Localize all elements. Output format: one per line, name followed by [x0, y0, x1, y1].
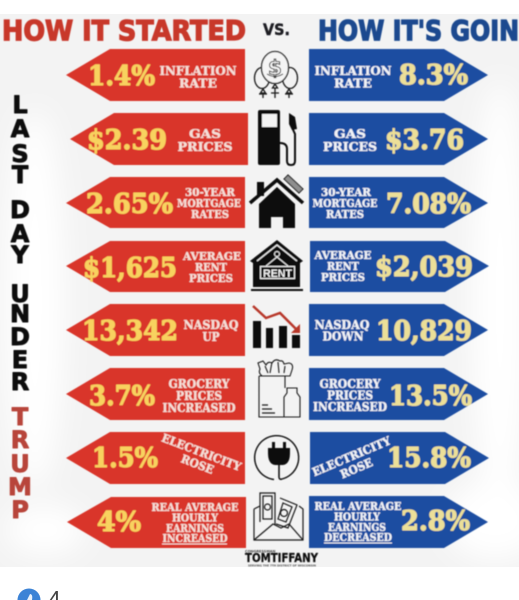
row: earnings 2.8%: DECREASED: [324, 530, 392, 544]
row: mortgage 7.08%: RATES: [326, 207, 364, 221]
row: nasdaq 13,342: UP: [202, 329, 220, 344]
row: grocery 13.5%: 13.5%: [389, 381, 472, 412]
row: mortgage 7.08%: 30-YEAR: [321, 185, 371, 199]
row: grocery 3.7%: GROCERY: [168, 376, 230, 391]
row: rent $1,625: RENT: [195, 260, 227, 274]
row: gas $2.39: $2.39: [87, 125, 167, 156]
row: rent $2,039: PRICES: [321, 270, 365, 284]
row: inflation 8.3%: INFLATION: [314, 63, 392, 78]
row: gas $3.76: [309, 113, 488, 165]
row: grocery 13.5%: [309, 368, 488, 420]
row: inflation 1.4%: [66, 49, 245, 101]
row: mortgage 2.65%: RATES: [191, 207, 229, 221]
panel: blue column, how it's going: [309, 49, 489, 548]
row: inflation 1.4%: INFLATION: [160, 63, 236, 78]
row: grocery 13.5%: INCREASED: [313, 399, 387, 414]
reaction: like count: [18, 586, 61, 600]
vertical label: last day under trump: R: [11, 426, 29, 454]
row: earnings 2.8%: HOURLY: [334, 510, 381, 524]
title: how it started: HOW IT STARTED: [2, 15, 246, 47]
row: earnings 4%: [67, 497, 246, 548]
row: electricity 15.8%: ROSE: [338, 455, 375, 481]
vertical label: last day under trump: Y: [10, 241, 29, 269]
row: earnings 2.8%: 2.8%: [401, 506, 470, 537]
row: rent $1,625: [66, 241, 245, 292]
vertical label: last day under trump: A: [11, 220, 30, 248]
versus label: VS.: [263, 20, 290, 39]
vertical label: last day under trump: M: [8, 473, 32, 501]
row: gas $2.39: GAS: [189, 126, 221, 141]
vertical label: last day under trump: L: [12, 91, 28, 119]
row: earnings 4%: INCREASED: [162, 531, 228, 545]
vertical label: last day under trump: D: [10, 323, 30, 351]
row: electricity 1.5%: 1.5%: [92, 443, 158, 474]
row: grocery 3.7%: 3.7%: [89, 381, 155, 412]
row: nasdaq 10,829: 10,829: [376, 316, 472, 347]
icon: envelope with money: [254, 493, 303, 540]
row: earnings 2.8%: EARNINGS: [328, 520, 386, 534]
icon: falling bar chart: [253, 306, 300, 348]
vertical label: last day under trump: N: [10, 300, 30, 328]
row: nasdaq 10,829: [309, 304, 488, 356]
icon: grocery bag and milk carton: [258, 360, 300, 417]
row: electricity 1.5%: ELECTRICITY: [160, 431, 244, 474]
icon: dollar balloons: $: [268, 56, 282, 80]
row: mortgage 7.08%: [309, 177, 488, 228]
vertical label: last day under trump: R: [11, 368, 29, 396]
vertical label: last day under trump: [8, 91, 32, 524]
row: gas $2.39: PRICES: [178, 139, 232, 154]
row: grocery 13.5%: PRICES: [327, 388, 373, 402]
row: grocery 3.7%: INCREASED: [162, 400, 236, 415]
icon: dollar balloons: [254, 52, 298, 98]
row: grocery 3.7%: PRICES: [176, 388, 222, 403]
row: mortgage 7.08%: MORTGAGE: [312, 196, 378, 210]
icon: gas pump: [258, 110, 297, 165]
row: rent $2,039: AVERAGE: [314, 248, 372, 262]
vertical label: last day under trump: T: [12, 403, 29, 431]
icon: electric plug in circle: [255, 436, 299, 480]
row: gas $3.76: PRICES: [323, 139, 377, 154]
row: nasdaq 13,342: [66, 304, 245, 356]
row: electricity 15.8%: 15.8%: [387, 443, 471, 474]
vertical label: last day under trump: S: [11, 140, 29, 168]
vertical label: last day under trump: T: [12, 161, 29, 189]
row: mortgage 2.65%: MORTGAGE: [177, 196, 241, 210]
row: inflation 1.4%: RATE: [179, 76, 217, 90]
row: rent $1,625: PRICES: [189, 271, 233, 285]
icon: rent sign on house: RENT: [263, 268, 292, 280]
row: nasdaq 13,342: 13,342: [82, 316, 178, 347]
logo: tom tiffany: [245, 550, 318, 568]
logo: tom tiffany: TOMTIFFANY: [245, 551, 318, 565]
row: gas $2.39: [70, 113, 248, 165]
row: electricity 1.5%: ROSE: [179, 452, 216, 477]
row: rent $2,039: $2,039: [375, 252, 473, 283]
vertical label: last day under trump: U: [10, 450, 30, 478]
row: nasdaq 13,342: NASDAQ: [184, 317, 239, 332]
row: electricity 15.8%: [310, 432, 489, 484]
row: earnings 4%: REAL AVERAGE: [152, 500, 239, 514]
vertical label: last day under trump: D: [10, 196, 30, 224]
row: mortgage 7.08%: 7.08%: [386, 189, 471, 220]
row: electricity 15.8%: ELECTRICITY: [310, 433, 394, 479]
row: earnings 4%: 4%: [97, 507, 141, 538]
row: mortgage 2.65%: 2.65%: [86, 189, 173, 220]
vertical label: last day under trump: A: [11, 115, 30, 143]
panel: red column, how it started: [66, 49, 248, 548]
row: inflation 8.3%: 8.3%: [399, 60, 468, 91]
row: rent $2,039: RENT: [327, 259, 359, 273]
row: rent $1,625: $1,625: [83, 253, 177, 284]
row: rent $1,625: AVERAGE: [182, 249, 241, 263]
row: earnings 4%: HOURLY: [172, 510, 219, 524]
row: inflation 8.3%: [309, 49, 488, 101]
row: earnings 4%: EARNINGS: [166, 521, 224, 535]
logo: tom tiffany: SERVING THE 7TH DISTRICT OF WISCONSIN: [248, 564, 316, 568]
row: gas $3.76: $3.76: [385, 125, 464, 156]
row: grocery 13.5%: GROCERY: [320, 376, 381, 391]
row: mortgage 2.65%: [66, 177, 245, 228]
vertical label: last day under trump: E: [12, 346, 28, 374]
row: rent $2,039: [310, 241, 489, 292]
row: mortgage 2.65%: 30-YEAR: [185, 185, 235, 199]
row: inflation 8.3%: RATE: [334, 76, 372, 90]
row: electricity 1.5%: [66, 431, 245, 484]
row: earnings 2.8%: [309, 496, 488, 548]
logo: tom tiffany: CONGRESSMAN: [245, 550, 276, 554]
row: grocery 3.7%: [66, 368, 245, 420]
row: nasdaq 10,829: NASDAQ: [314, 317, 370, 332]
row: gas $3.76: GAS: [334, 126, 366, 141]
row: earnings 2.8%: REAL AVERAGE: [314, 499, 402, 513]
row: nasdaq 10,829: DOWN: [322, 328, 364, 344]
vertical label: last day under trump: P: [11, 496, 29, 524]
icon: house with mortgage paper: [250, 175, 303, 228]
icon: rent sign on house: [250, 240, 303, 291]
vertical label: last day under trump: U: [10, 280, 30, 308]
row: inflation 1.4%: 1.4%: [88, 61, 155, 92]
